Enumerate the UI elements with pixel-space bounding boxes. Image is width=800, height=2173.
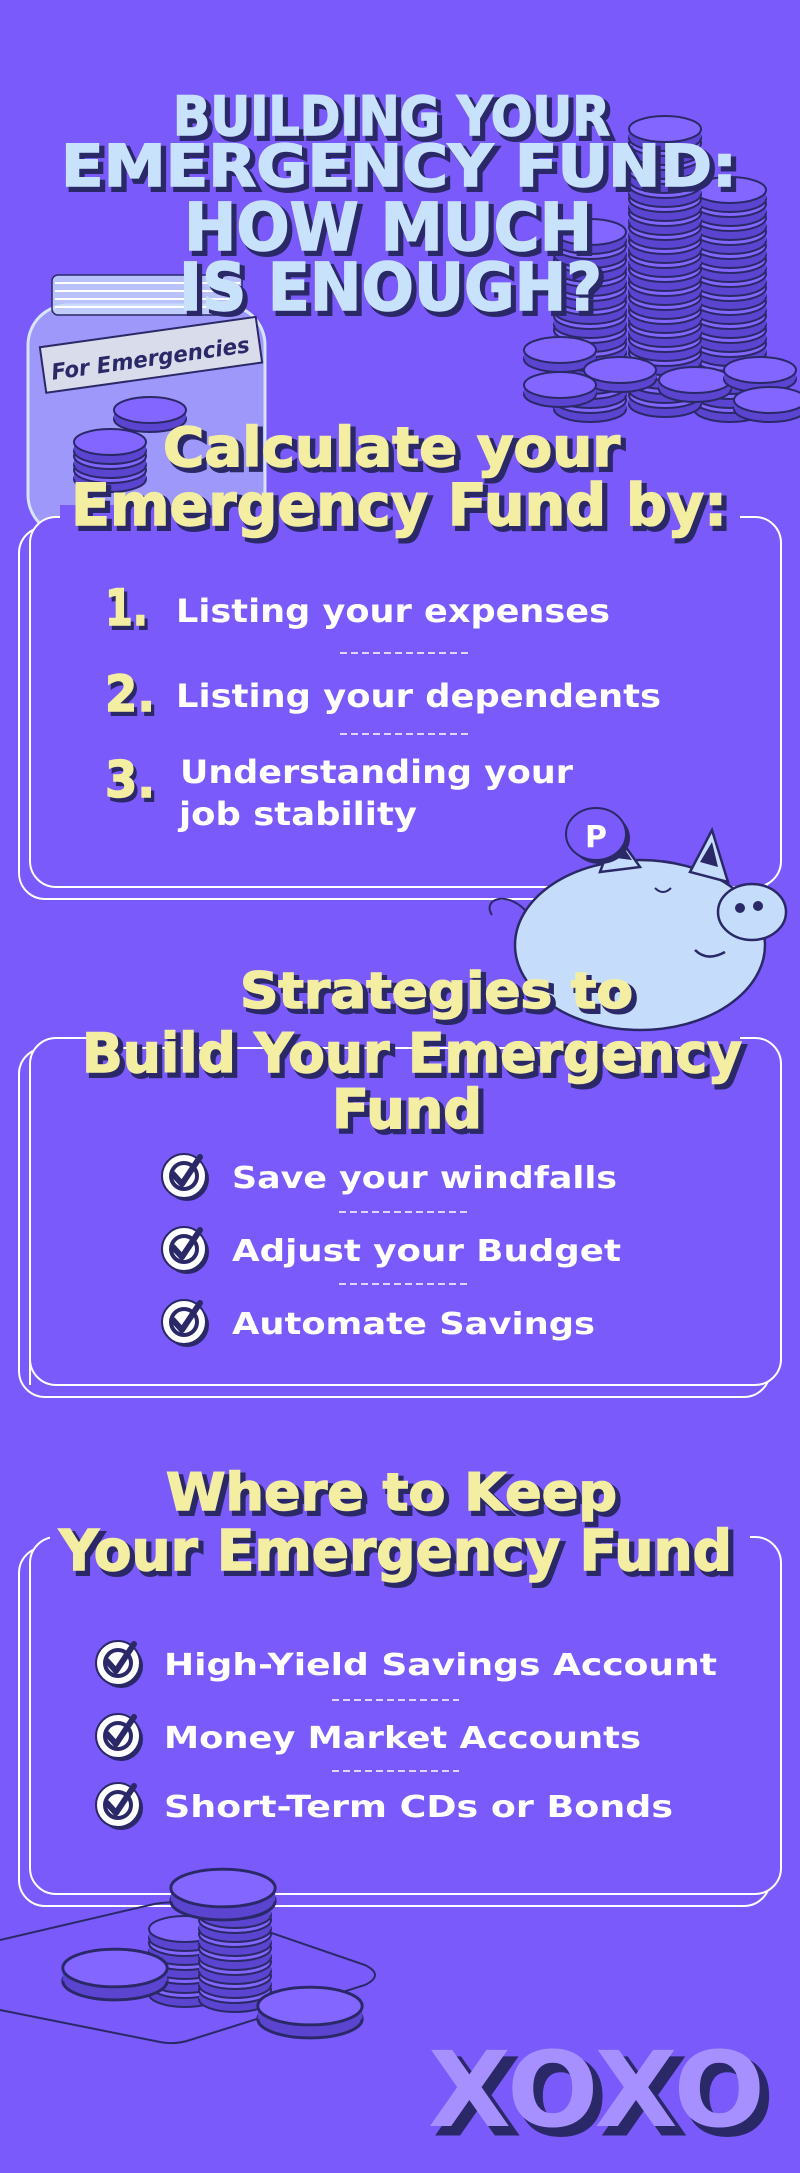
list: steps: 2. xyxy=(108,669,158,727)
panel: strategies xyxy=(19,962,781,1397)
logo: XOXO: XOXO xyxy=(428,2029,765,2151)
title: BUILDING YOUR xyxy=(173,85,610,148)
illustration: piggy bank xyxy=(490,808,786,1030)
illustration: coins bottom left xyxy=(0,1869,375,2043)
heading: strategies: Fund xyxy=(336,1082,486,1145)
heading: where to keep: Your Emergency Fund xyxy=(62,1523,736,1588)
title: EMERGENCY FUND: xyxy=(65,136,741,204)
list: steps: 1. xyxy=(108,583,151,641)
title: BUILDING YOUR xyxy=(177,89,614,152)
list: steps: job stability xyxy=(177,795,417,833)
list: steps: Listing your dependents xyxy=(176,677,661,715)
list: steps: Listing your expenses xyxy=(176,592,610,630)
list: steps: 3. xyxy=(108,755,158,813)
title: IS ENOUGH? xyxy=(183,253,606,330)
title: HOW MUCH xyxy=(184,189,592,266)
heading: calculate: Calculate your xyxy=(167,420,624,483)
list: strategies xyxy=(162,1154,621,1347)
list: accounts: Money Market Accounts xyxy=(164,1721,641,1756)
heading: calculate: Calculate your xyxy=(163,416,620,479)
heading: strategies: Fund xyxy=(332,1078,482,1141)
list: accounts: Short-Term CDs or Bonds xyxy=(164,1790,673,1825)
list: accounts: High-Yield Savings Account xyxy=(164,1648,717,1683)
list: steps: 2. xyxy=(105,665,155,723)
list: steps: 1. xyxy=(105,579,148,637)
heading: strategies: Strategies to xyxy=(240,962,633,1020)
heading: where to keep xyxy=(58,1463,736,1588)
heading: strategies: Build Your Emergency xyxy=(86,1026,746,1089)
heading: calculate: Emergency Fund by: xyxy=(75,475,731,543)
illustration: emergency jar xyxy=(28,275,265,535)
heading: strategies: Build Your Emergency xyxy=(82,1022,742,1085)
title xyxy=(61,85,741,330)
list: strategies: Save your windfalls xyxy=(232,1161,617,1196)
title: HOW MUCH xyxy=(188,193,596,270)
list: accounts xyxy=(96,1641,717,1830)
heading: strategies: Strategies to xyxy=(244,966,637,1024)
label: For Emergencies xyxy=(40,317,262,393)
title: IS ENOUGH? xyxy=(179,249,602,326)
heading: where to keep: Where to Keep xyxy=(170,1467,621,1527)
heading: calculate xyxy=(71,416,731,543)
heading: calculate: Emergency Fund by: xyxy=(71,471,727,539)
list: steps: 3. xyxy=(105,751,155,809)
illustration: coin stacks top right xyxy=(524,116,800,422)
panel: where to keep xyxy=(19,1463,781,1906)
list: steps: Understanding your xyxy=(180,753,573,791)
list: steps xyxy=(105,579,661,833)
title: EMERGENCY FUND: xyxy=(61,132,737,200)
list: strategies: Automate Savings xyxy=(232,1307,595,1342)
label: For Emergencies: For Emergencies xyxy=(50,333,251,386)
list: strategies: Adjust your Budget xyxy=(232,1234,621,1269)
heading: where to keep: Where to Keep xyxy=(166,1463,617,1523)
icon: coin on pig: P xyxy=(585,820,607,855)
heading: where to keep: Your Emergency Fund xyxy=(58,1519,732,1584)
logo: XOXO: XOXO xyxy=(436,2037,773,2159)
heading: strategies xyxy=(82,962,746,1145)
panel: calculate xyxy=(19,416,781,899)
icon: coin on pig xyxy=(566,808,630,864)
